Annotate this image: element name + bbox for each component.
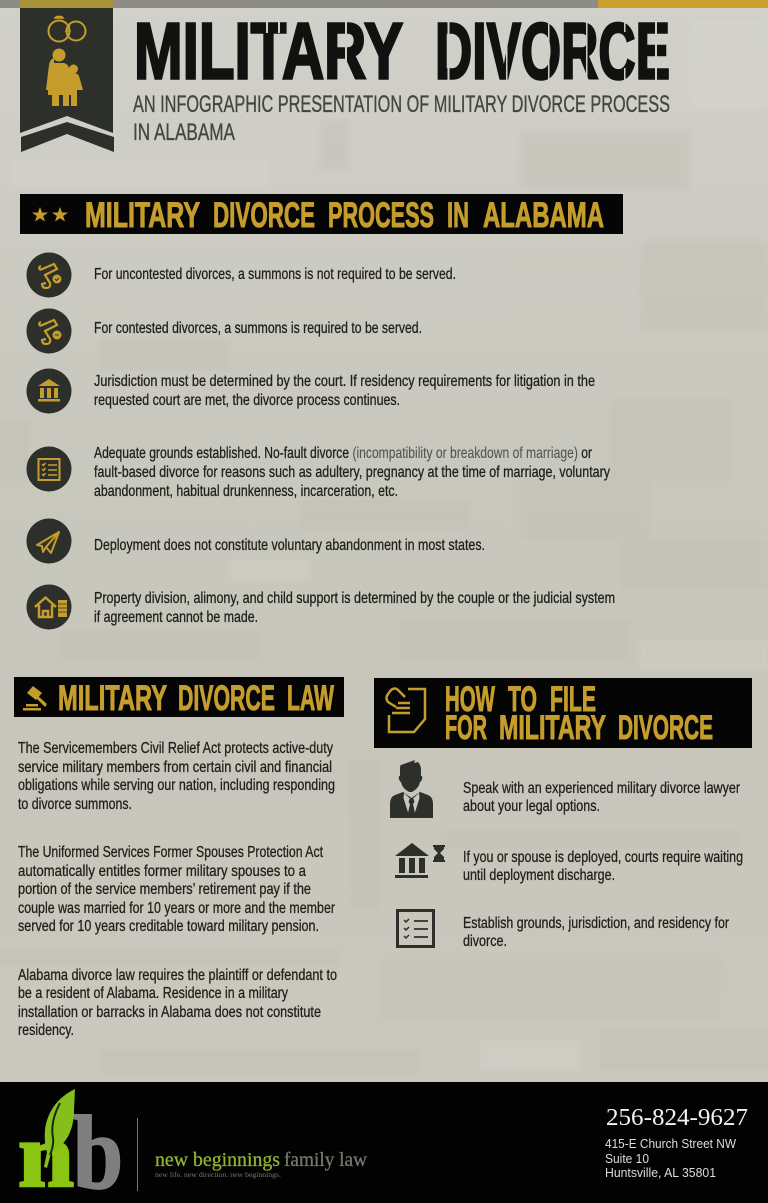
process step 4: grounds: abandonment, habitual drunkenness, incarceration, etc. bbox=[94, 483, 398, 500]
heading: military divorce process in alabama: ALABAMA bbox=[483, 196, 604, 235]
text block: former spouses protection act: couple was married for 10 years or more and the member bbox=[18, 900, 336, 917]
process step 5: deployment bbox=[26, 518, 485, 564]
text block: servicemembers civil relief act: The Servicemembers Civil Relief Act protects active-duty bbox=[18, 740, 333, 757]
contact: address: Suite 10 bbox=[605, 1152, 649, 1166]
text block: servicemembers civil relief act: obligations while serving our nation, including responding bbox=[18, 777, 335, 794]
heading: military divorce process in alabama: MILITARY bbox=[85, 196, 200, 235]
heading: military divorce law: MILITARY bbox=[58, 679, 167, 718]
logo: wordmark: new life. new direction. new beginnings. bbox=[155, 1170, 281, 1179]
heading: military divorce process in alabama: DIVORCE bbox=[213, 196, 315, 235]
icon: checklist bbox=[398, 910, 434, 946]
text block: servicemembers civil relief act bbox=[18, 740, 335, 813]
text block: former spouses protection act: portion of the service members’ retirement pay if the bbox=[18, 881, 311, 898]
icon: summons scroll with minus bbox=[39, 320, 62, 344]
text block: alabama residency bbox=[18, 967, 337, 1039]
process step 4: grounds: fault-based divorce for reasons such as adultery, pregnancy at the time of marriage, voluntary bbox=[94, 464, 610, 481]
logo: new beginnings mark: n bbox=[18, 1104, 74, 1203]
logo: wordmark: new beginnings bbox=[155, 1149, 280, 1171]
process step 5: deployment: Deployment does not constitute voluntary abandonment in most states. bbox=[94, 537, 485, 554]
process step 2: contested: For contested divorces, a summons is required to be served. bbox=[94, 320, 422, 337]
heading: military divorce law: DIVORCE bbox=[178, 679, 275, 718]
logo: wordmark: family law bbox=[284, 1149, 368, 1171]
heading: how to file for military divorce: TO bbox=[508, 680, 537, 719]
icon: paperclip document bbox=[386, 688, 425, 732]
icon: wedding rings bbox=[48, 16, 86, 42]
logo: new beginnings mark bbox=[18, 1089, 138, 1203]
process step 6: property bbox=[26, 584, 615, 630]
subtitle bbox=[133, 91, 670, 146]
contact: address: 415-E Church Street NW bbox=[605, 1137, 736, 1151]
icon: paper plane bbox=[37, 532, 59, 553]
text block: alabama residency: installation or barracks in Alabama does not constitute bbox=[18, 1004, 321, 1021]
icon: checklist bbox=[38, 459, 60, 480]
heading: how to file for military divorce: FILE bbox=[550, 680, 596, 719]
icon: courthouse bbox=[38, 379, 60, 402]
process step 4: grounds: Adequate grounds established. No-fault divorce (incompatibility or breakdown of marriage) or bbox=[94, 445, 593, 462]
text block: servicemembers civil relief act: to divorce summons. bbox=[18, 796, 132, 813]
process step 1: uncontested: For uncontested divorces, a summons is not required to be served. bbox=[94, 266, 456, 283]
heading: military divorce process in alabama: PROCESS bbox=[328, 196, 434, 235]
text block: former spouses protection act: served for 10 years creditable toward military pension. bbox=[18, 918, 319, 935]
how-to step 1: speak with lawyer bbox=[390, 760, 741, 818]
heading: military divorce law: LAW bbox=[287, 679, 334, 718]
badge: divorce emblem bbox=[20, 8, 114, 152]
icon: two stars bbox=[32, 207, 68, 222]
icon: summons scroll with check bbox=[39, 264, 62, 288]
process step 6: property: if agreement cannot be made. bbox=[94, 609, 258, 626]
process step 3: jurisdiction bbox=[26, 368, 595, 414]
heading: how to file for military divorce: FOR bbox=[445, 709, 487, 747]
contact: phone number: 256-824-9627 bbox=[606, 1105, 748, 1131]
heading: how to file for military divorce: MILITARY bbox=[499, 709, 606, 747]
heading: military divorce process in alabama bbox=[20, 194, 623, 235]
process step 2: contested bbox=[26, 308, 422, 354]
icon: mother and child bbox=[46, 48, 83, 106]
how-to step 1: speak with lawyer: about your legal options. bbox=[463, 798, 600, 815]
how-to step 2: deployment wait: until deployment discharge. bbox=[463, 867, 615, 884]
icon: gavel bbox=[23, 686, 47, 710]
how-to step 3: establish grounds bbox=[398, 910, 730, 950]
title bbox=[134, 6, 670, 96]
process step 3: jurisdiction: Jurisdiction must be determined by the court. If residency requirements for litigation in the bbox=[94, 373, 595, 390]
text block: former spouses protection act: The Uniformed Services Former Spouses Protection Act bbox=[18, 844, 323, 861]
top colour bar bbox=[0, 0, 768, 8]
icon: courthouse and hourglass bbox=[395, 843, 445, 878]
process step 1: uncontested bbox=[26, 252, 456, 298]
heading: military divorce process in alabama: IN bbox=[447, 196, 469, 235]
logo: wordmark bbox=[155, 1149, 368, 1179]
title: MILITARY bbox=[134, 6, 403, 96]
text block: alabama residency: Alabama divorce law requires the plaintiff or defendant to bbox=[18, 967, 337, 984]
icon: house and coins bbox=[35, 598, 67, 617]
heading: how to file for military divorce: HOW bbox=[445, 680, 495, 719]
text block: servicemembers civil relief act: service military members from certain civil and financial bbox=[18, 759, 332, 776]
text block: former spouses protection act: automatically entitles former military spouses to a bbox=[18, 863, 306, 880]
heading: how to file for military divorce bbox=[374, 678, 752, 748]
process step 3: jurisdiction: requested court are met, the divorce process continues. bbox=[94, 392, 400, 409]
contact: address: Huntsville, AL 35801 bbox=[605, 1166, 716, 1180]
text block: former spouses protection act bbox=[18, 844, 336, 935]
process step 4: grounds bbox=[26, 445, 610, 500]
text block: alabama residency: residency. bbox=[18, 1022, 74, 1039]
subtitle: IN ALABAMA bbox=[133, 119, 235, 146]
contact: address bbox=[605, 1137, 736, 1180]
text block: alabama residency: be a resident of Alabama. Residence in a military bbox=[18, 985, 288, 1002]
footer bbox=[0, 1082, 768, 1203]
how-to step 3: establish grounds: divorce. bbox=[463, 933, 507, 950]
how-to step 2: deployment wait bbox=[395, 843, 743, 884]
heading: military divorce law bbox=[14, 677, 344, 718]
icon: lawyer bbox=[390, 760, 433, 818]
process step 6: property: Property division, alimony, and child support is determined by the couple or the judicial system bbox=[94, 590, 615, 607]
